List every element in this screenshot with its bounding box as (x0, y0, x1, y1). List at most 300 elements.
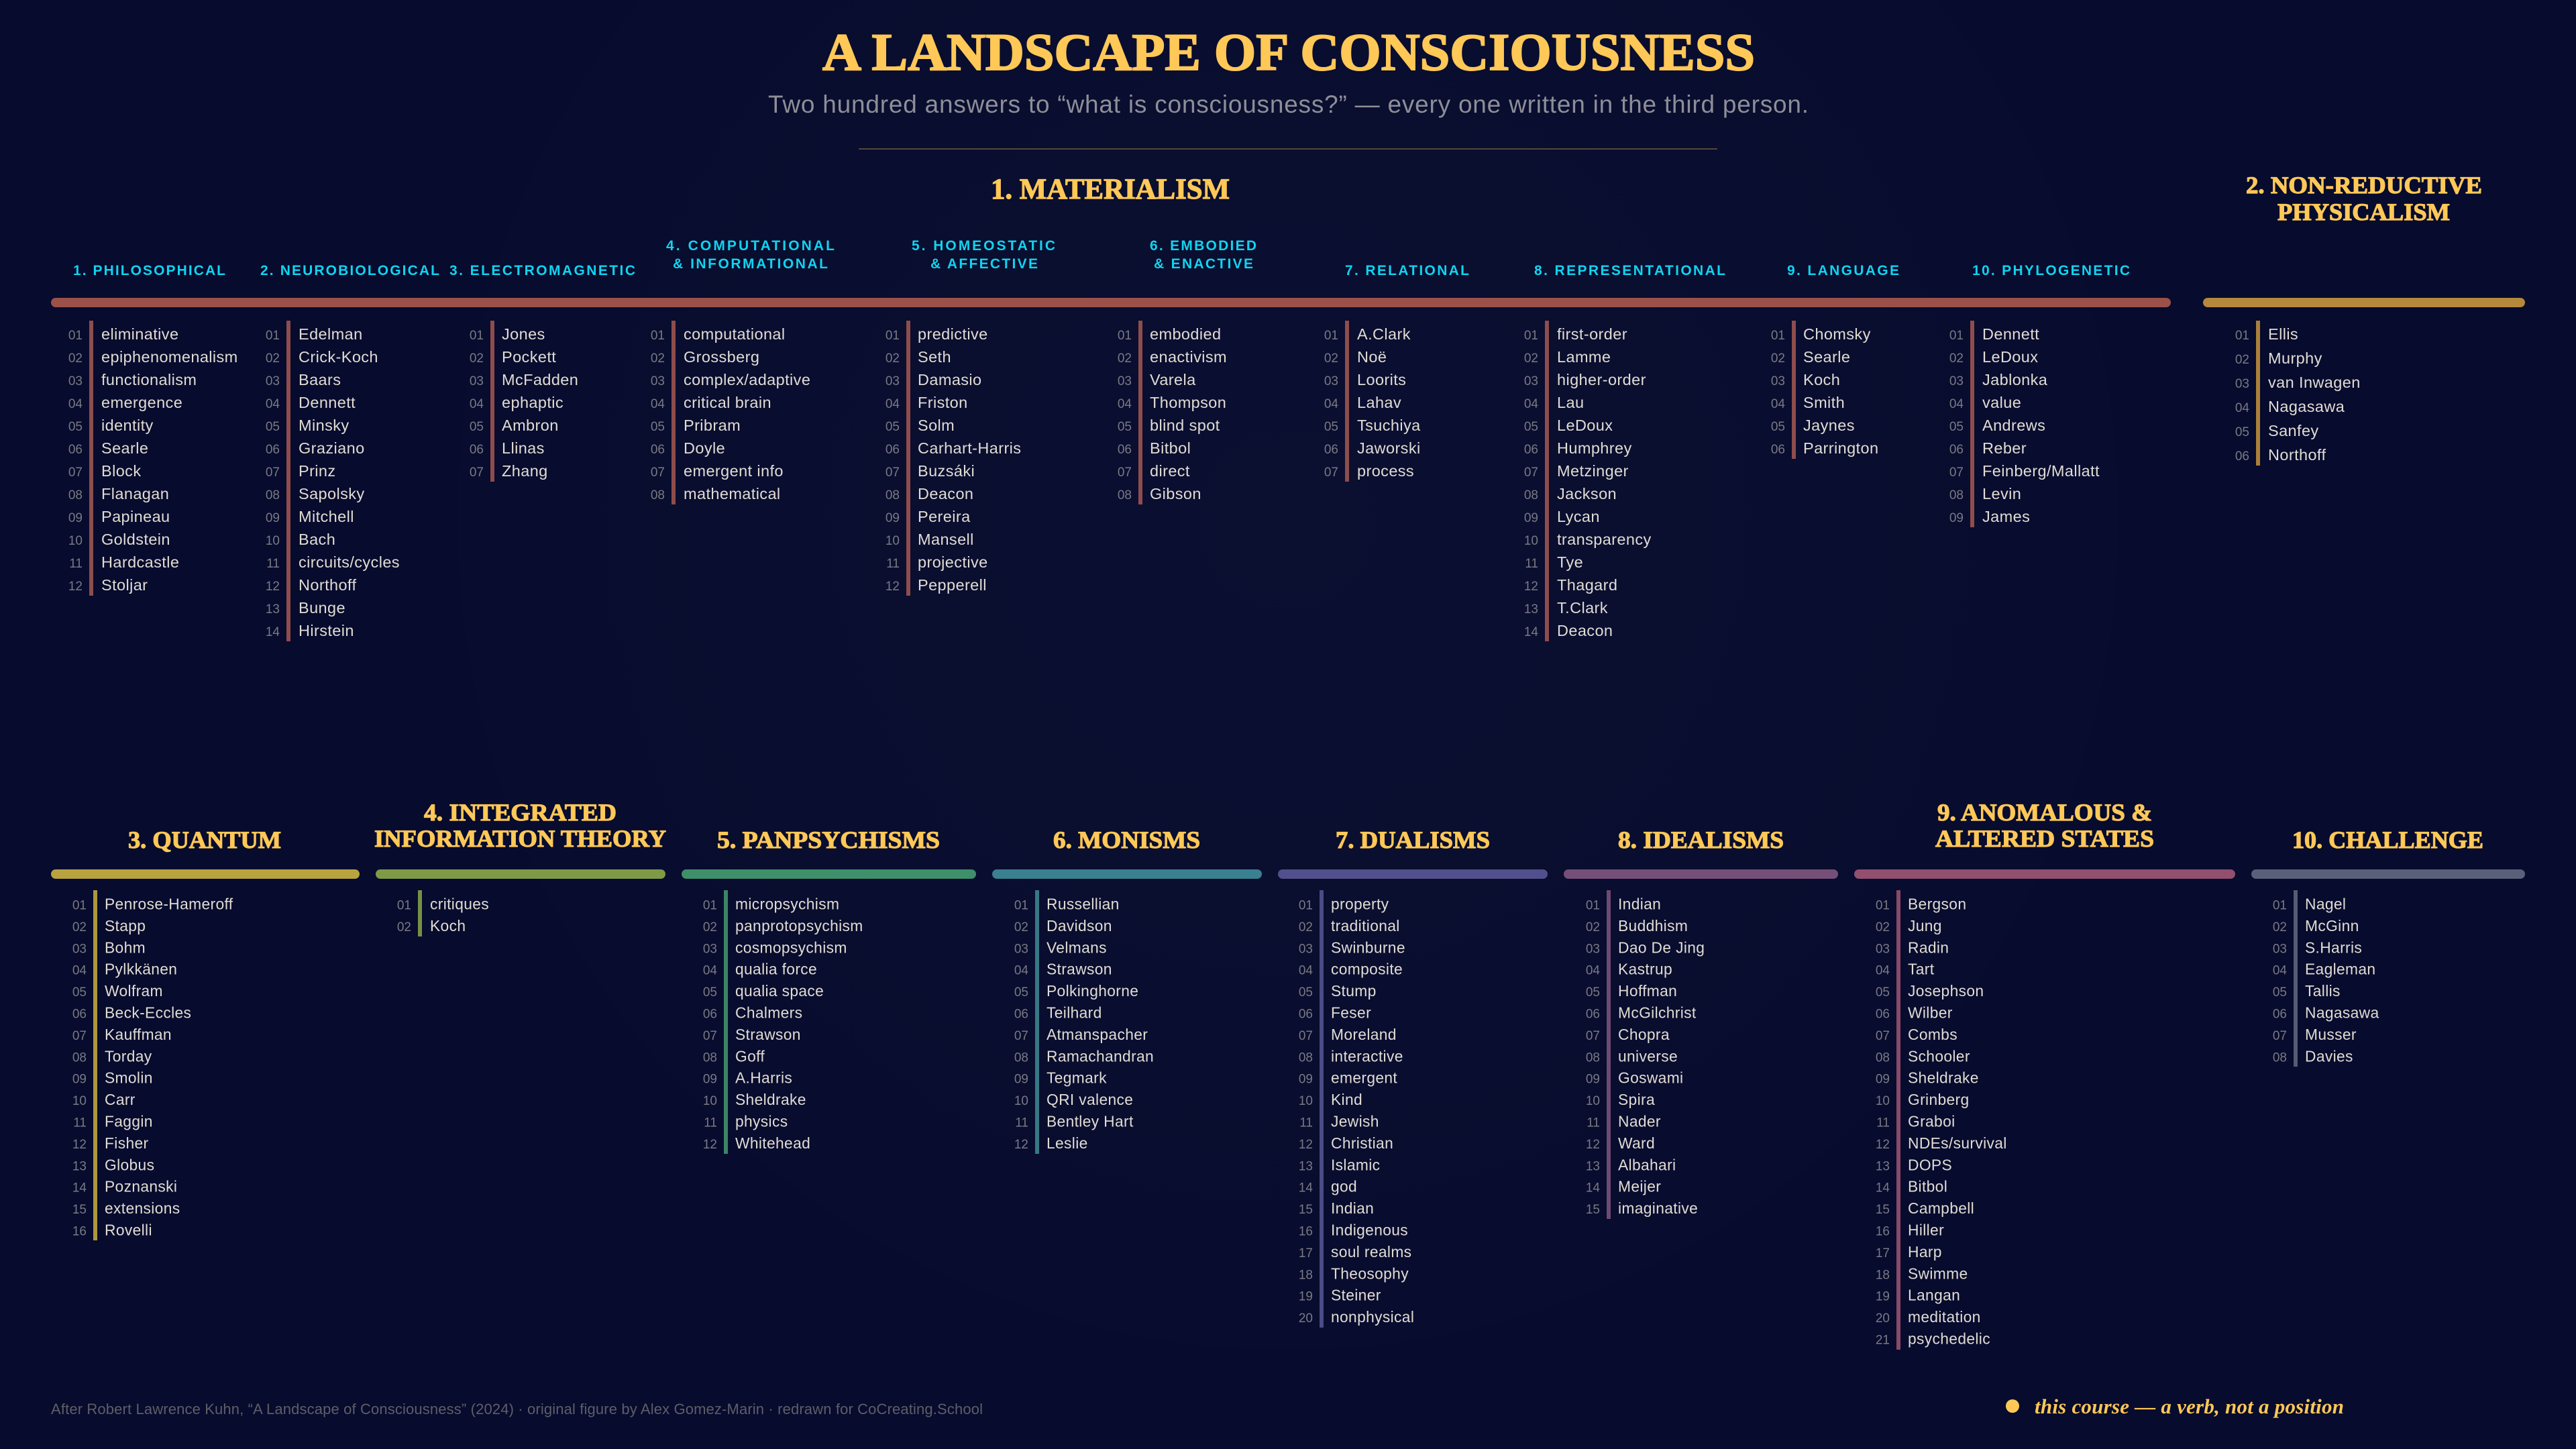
names: emergent (1331, 1069, 1397, 1087)
names: Northoff (2268, 446, 2326, 464)
names: qualia force (735, 961, 817, 978)
row numbers: 02 (2235, 353, 2249, 367)
row numbers: 02 (1118, 352, 1132, 366)
names: mathematical (684, 485, 781, 502)
names: Combs (1908, 1026, 1957, 1043)
names: Davidson (1046, 917, 1112, 934)
column: language (1771, 263, 1899, 459)
names: Teilhard (1046, 1004, 1102, 1021)
row numbers: 11 (704, 1116, 717, 1130)
names: Carr (105, 1091, 136, 1108)
names: Steiner (1331, 1287, 1381, 1304)
row numbers: 02 (266, 352, 280, 366)
title: A LANDSCAPE OF CONSCIOUSNESS (822, 23, 1755, 81)
names: Baars (299, 371, 341, 388)
row numbers: 08 (2273, 1051, 2287, 1065)
names: NDEs/survival (1908, 1134, 2007, 1152)
row numbers: 05 (703, 985, 717, 1000)
row numbers: 06 (2273, 1008, 2287, 1021)
row numbers: 02 (1299, 920, 1313, 934)
row numbers: 06 (1299, 1008, 1313, 1021)
names: emergent info (684, 462, 784, 480)
row numbers: 02 (885, 352, 900, 366)
colour band (1278, 869, 1548, 879)
names: Gibson (1150, 485, 1201, 502)
names: Nagasawa (2268, 398, 2345, 415)
row numbers: 01 (1014, 899, 1028, 912)
row numbers: 03 (651, 374, 665, 388)
column: electromagnetic (449, 263, 635, 482)
names: Bergson (1908, 895, 1966, 912)
row numbers: 07 (703, 1029, 717, 1043)
names: Strawson (1046, 961, 1112, 978)
names: Prinz (299, 462, 336, 480)
names: Murphy (2268, 350, 2322, 367)
names: Graboi (1908, 1112, 1955, 1130)
row numbers: 11 (266, 557, 280, 571)
row numbers: 11 (886, 557, 900, 571)
heading: PHYSICALISM (2277, 199, 2450, 225)
accent bar (1607, 890, 1611, 1219)
names: enactivism (1150, 348, 1227, 366)
names: traditional (1331, 917, 1400, 934)
heading: 4. INTEGRATED (424, 799, 616, 826)
accent bar (418, 890, 422, 936)
names: QRI valence (1046, 1091, 1133, 1108)
names: Nagasawa (2305, 1004, 2379, 1021)
names: Levin (1982, 485, 2021, 502)
row numbers: 19 (1876, 1290, 1890, 1304)
row numbers: 09 (1014, 1073, 1028, 1087)
colour band (992, 869, 1262, 879)
row numbers: 05 (1324, 420, 1338, 434)
subheading: 5. HOMEOSTATIC (912, 238, 1055, 254)
names: Tye (1557, 553, 1583, 571)
row numbers: 03 (2235, 377, 2249, 391)
subheading: 4. COMPUTATIONAL (666, 238, 835, 254)
row numbers: 07 (1586, 1029, 1600, 1043)
names: Buddhism (1618, 917, 1688, 934)
heading: 5. PANPSYCHISMS (717, 826, 940, 853)
row numbers: 11 (1015, 1116, 1028, 1130)
accent bar (1970, 321, 1974, 527)
names: Pylkkänen (105, 961, 177, 978)
row numbers: 12 (68, 580, 83, 594)
names: Jones (502, 325, 545, 343)
names: Bentley Hart (1046, 1112, 1134, 1130)
subheading: 8. REPRESENTATIONAL (1534, 263, 1725, 278)
row numbers: 03 (72, 942, 87, 956)
names: Musser (2305, 1026, 2357, 1043)
row numbers: 10 (72, 1094, 87, 1108)
row numbers: 07 (470, 466, 484, 480)
names: Goswami (1618, 1069, 1683, 1087)
names: Stapp (105, 917, 146, 934)
names: extensions (105, 1199, 180, 1217)
names: S.Harris (2305, 938, 2362, 956)
row numbers: 01 (397, 899, 411, 912)
row numbers: 08 (651, 488, 665, 502)
names: Bitbol (1908, 1178, 1947, 1195)
names: Doyle (684, 439, 725, 457)
row numbers: 14 (1524, 625, 1538, 639)
row numbers: 08 (703, 1051, 717, 1065)
row numbers: 16 (1876, 1225, 1890, 1238)
row numbers: 05 (72, 985, 87, 1000)
names: Chalmers (735, 1004, 802, 1021)
heading: INFORMATION THEORY (374, 825, 666, 852)
colour band (1854, 869, 2235, 879)
row numbers: 01 (1586, 899, 1600, 912)
row numbers: 15 (1586, 1203, 1600, 1217)
names: Parrington (1803, 439, 1878, 457)
row numbers: 06 (1949, 443, 1964, 457)
row numbers: 05 (1299, 985, 1313, 1000)
colour band (682, 869, 976, 879)
names: Stoljar (101, 576, 148, 594)
names: Koch (430, 917, 466, 934)
row numbers: 11 (1587, 1116, 1600, 1130)
row numbers: 05 (470, 420, 484, 434)
names: Andrews (1982, 417, 2045, 434)
row numbers: 07 (1118, 466, 1132, 480)
accent bar (1545, 321, 1549, 641)
row numbers: 06 (651, 443, 665, 457)
row numbers: 04 (1118, 397, 1132, 411)
names: embodied (1150, 325, 1221, 343)
row numbers: 04 (470, 397, 484, 411)
names: Tallis (2305, 982, 2341, 1000)
accent bar (1035, 890, 1039, 1154)
row numbers: 08 (885, 488, 900, 502)
row numbers: 04 (1586, 964, 1600, 978)
names: Faggin (105, 1112, 153, 1130)
column: computational and informational (651, 238, 835, 504)
names: Jackson (1557, 485, 1617, 502)
names: Buzsáki (918, 462, 975, 480)
names: Damasio (918, 371, 982, 388)
row numbers: 13 (266, 602, 280, 616)
row numbers: 02 (68, 352, 83, 366)
names: Bach (299, 531, 335, 548)
row numbers: 03 (2273, 942, 2287, 956)
row numbers: 01 (1524, 329, 1538, 343)
names: Kastrup (1618, 961, 1672, 978)
names: Bunge (299, 599, 345, 616)
names: Torday (105, 1047, 152, 1065)
row numbers: 18 (1299, 1268, 1313, 1282)
names: Pribram (684, 417, 741, 434)
row numbers: 07 (72, 1029, 87, 1043)
accent bar (286, 321, 290, 641)
names: Ward (1618, 1134, 1655, 1152)
row numbers: 10 (885, 534, 900, 548)
row numbers: 03 (266, 374, 280, 388)
names: Albahari (1618, 1156, 1676, 1173)
panel: 6. Monisms (992, 826, 1262, 1154)
column: embodied and enactive (1118, 238, 1256, 504)
colour band (376, 869, 665, 879)
names: Rovelli (105, 1221, 152, 1238)
row numbers: 10 (1524, 534, 1538, 548)
row numbers: 04 (1524, 397, 1538, 411)
names: Crick-Koch (299, 348, 378, 366)
names: direct (1150, 462, 1190, 480)
names: McGilchrist (1618, 1004, 1697, 1021)
names: Ramachandran (1046, 1047, 1154, 1065)
panel: 4. Integrated information theory (374, 799, 666, 936)
names: McFadden (502, 371, 578, 388)
names: Sapolsky (299, 485, 365, 502)
row numbers: 04 (885, 397, 900, 411)
row numbers: 14 (1586, 1181, 1600, 1195)
row numbers: 09 (1876, 1073, 1890, 1087)
row numbers: 04 (266, 397, 280, 411)
row numbers: 02 (703, 920, 717, 934)
names: Chomsky (1803, 325, 1871, 343)
row numbers: 07 (1014, 1029, 1028, 1043)
row numbers: 15 (72, 1203, 87, 1217)
accent bar (490, 321, 494, 482)
row numbers: 20 (1299, 1311, 1313, 1326)
row numbers: 16 (72, 1225, 87, 1238)
names: Kauffman (105, 1026, 172, 1043)
row numbers: 01 (1949, 329, 1964, 343)
names: Islamic (1331, 1156, 1380, 1173)
names: Christian (1331, 1134, 1393, 1152)
row numbers: 06 (703, 1008, 717, 1021)
names: Swimme (1908, 1265, 1968, 1282)
names: panprotopsychism (735, 917, 863, 934)
row numbers: 09 (72, 1073, 87, 1087)
heading: 8. IDEALISMS (1618, 826, 1784, 853)
names: McGinn (2305, 917, 2359, 934)
row numbers: 05 (651, 420, 665, 434)
row numbers: 07 (1524, 466, 1538, 480)
row numbers: 15 (1876, 1203, 1890, 1217)
row numbers: 07 (1324, 466, 1338, 480)
row numbers: 10 (1299, 1094, 1313, 1108)
names: T.Clark (1557, 599, 1608, 616)
names: Meijer (1618, 1178, 1661, 1195)
names: Jaworski (1357, 439, 1421, 457)
row numbers: 11 (1876, 1116, 1890, 1130)
row numbers: 02 (651, 352, 665, 366)
row numbers: 07 (1949, 466, 1964, 480)
names: Minsky (299, 417, 350, 434)
row numbers: 01 (703, 899, 717, 912)
row numbers: 06 (72, 1008, 87, 1021)
row numbers: 01 (266, 329, 280, 343)
column: relational (1324, 263, 1469, 482)
names: Hiller (1908, 1221, 1944, 1238)
row numbers: 01 (1876, 899, 1890, 912)
names: Penrose-Hameroff (105, 895, 233, 912)
row numbers: 01 (1324, 329, 1338, 343)
row numbers: 04 (703, 964, 717, 978)
subheading: 10. PHYLOGENETIC (1972, 263, 2130, 278)
names: Block (101, 462, 141, 480)
row numbers: 02 (470, 352, 484, 366)
subheading (1150, 238, 1256, 272)
subheading: 6. EMBODIED (1150, 238, 1256, 254)
names: Zhang (502, 462, 548, 480)
names: Carhart-Harris (918, 439, 1021, 457)
heading: ALTERED STATES (1935, 825, 2154, 852)
panel: 5. Panpsychisms (682, 826, 976, 1154)
names: Indian (1618, 895, 1661, 912)
row numbers: 03 (1324, 374, 1338, 388)
subheading: 1. PHILOSOPHICAL (73, 263, 225, 278)
heading: 6. MONISMS (1053, 826, 1200, 853)
names: Atmanspacher (1046, 1026, 1148, 1043)
accent bar (89, 321, 93, 596)
names: Eagleman (2305, 961, 2375, 978)
names: micropsychism (735, 895, 839, 912)
names: Lau (1557, 394, 1584, 411)
names: eliminative (101, 325, 178, 343)
names: higher-order (1557, 371, 1646, 388)
names: Pockett (502, 348, 556, 366)
accent bar (1896, 890, 1900, 1350)
names: Dao De Jing (1618, 938, 1705, 956)
panel: 2. Non-reductive physicalism (2203, 172, 2525, 466)
row numbers: 07 (651, 466, 665, 480)
row numbers: 06 (1014, 1008, 1028, 1021)
panel: 1. Materialism (51, 174, 2171, 641)
names: LeDoux (1557, 417, 1613, 434)
names: Moreland (1331, 1026, 1397, 1043)
row numbers: 17 (1299, 1246, 1313, 1260)
names: Feinberg/Mallatt (1982, 462, 2100, 480)
accent bar (1320, 890, 1324, 1328)
names: predictive (918, 325, 988, 343)
heading: 1. Materialism: 1. MATERIALISM (991, 174, 1230, 205)
names: universe (1618, 1047, 1678, 1065)
names: Sheldrake (735, 1091, 806, 1108)
row numbers: 07 (1876, 1029, 1890, 1043)
row numbers: 10 (266, 534, 280, 548)
names: James (1982, 508, 2030, 525)
accent bar (93, 890, 97, 1240)
names: Tsuchiya (1357, 417, 1421, 434)
names: Varela (1150, 371, 1196, 388)
row numbers: 02 (1524, 352, 1538, 366)
row numbers: 10 (1014, 1094, 1028, 1108)
names: critiques (430, 895, 489, 912)
names: Smith (1803, 394, 1845, 411)
colour band (1564, 869, 1838, 879)
names: identity (101, 417, 154, 434)
row numbers: 14 (1299, 1181, 1313, 1195)
row numbers: 06 (1876, 1008, 1890, 1021)
names: A.Clark (1357, 325, 1411, 343)
row numbers: 07 (885, 466, 900, 480)
row numbers: 01 (651, 329, 665, 343)
row numbers: 04 (2273, 964, 2287, 978)
row numbers: 06 (1324, 443, 1338, 457)
names: Grinberg (1908, 1091, 1970, 1108)
row numbers: 10 (1586, 1094, 1600, 1108)
row numbers: 03 (1771, 374, 1785, 388)
names: Mitchell (299, 508, 354, 525)
row numbers: 08 (1014, 1051, 1028, 1065)
row numbers: 12 (1876, 1138, 1890, 1152)
names: Davies (2305, 1047, 2353, 1065)
names: Schooler (1908, 1047, 1970, 1065)
row numbers: 01 (72, 899, 87, 912)
names: qualia space (735, 982, 824, 1000)
names: Tegmark (1046, 1069, 1107, 1087)
row numbers: 12 (703, 1138, 717, 1152)
row numbers: 01 (885, 329, 900, 343)
names: Fisher (105, 1134, 148, 1152)
names: Wilber (1908, 1004, 1953, 1021)
row numbers: 10 (68, 534, 83, 548)
names: projective (918, 553, 988, 571)
panel: 10. Challenge (2251, 826, 2525, 1067)
names: Pereira (918, 508, 971, 525)
names: transparency (1557, 531, 1652, 548)
names: Langan (1908, 1287, 1960, 1304)
names: Noë (1357, 348, 1387, 366)
names: Whitehead (735, 1134, 810, 1152)
accent bar (2256, 321, 2260, 466)
row numbers: 04 (72, 964, 87, 978)
names: Swinburne (1331, 938, 1405, 956)
row numbers: 20 (1876, 1311, 1890, 1326)
names: complex/adaptive (684, 371, 810, 388)
subheading: 7. RELATIONAL (1345, 263, 1469, 278)
names: Llinas (502, 439, 545, 457)
row numbers: 01 (2235, 329, 2249, 343)
column: representational (1524, 263, 1725, 641)
names: meditation (1908, 1308, 1981, 1326)
names: Globus (105, 1156, 154, 1173)
row numbers: 02 (2273, 920, 2287, 934)
row numbers: 14 (266, 625, 280, 639)
accent bar (906, 321, 910, 596)
column: neurobiological (260, 263, 439, 641)
names: Goldstein (101, 531, 170, 548)
row numbers: 16 (1299, 1225, 1313, 1238)
names: Indigenous (1331, 1221, 1408, 1238)
row numbers: 09 (885, 511, 900, 525)
row numbers: 08 (1524, 488, 1538, 502)
names: Reber (1982, 439, 2027, 457)
names: Metzinger (1557, 462, 1629, 480)
heading: 3. QUANTUM (128, 826, 281, 853)
names: circuits/cycles (299, 553, 400, 571)
row numbers: 06 (266, 443, 280, 457)
subheading (912, 238, 1055, 272)
row numbers: 02 (1586, 920, 1600, 934)
row numbers: 05 (1771, 420, 1785, 434)
names: Tart (1908, 961, 1935, 978)
names: blind spot (1150, 417, 1220, 434)
row numbers: 01 (2273, 899, 2287, 912)
row numbers: 05 (1586, 985, 1600, 1000)
row numbers: 08 (1118, 488, 1132, 502)
row numbers: 01 (68, 329, 83, 343)
row numbers: 04 (1324, 397, 1338, 411)
row numbers: 05 (2235, 425, 2249, 439)
row numbers: 10 (703, 1094, 717, 1108)
row numbers: 08 (1299, 1051, 1313, 1065)
row numbers: 05 (2273, 985, 2287, 1000)
subheading: & INFORMATIONAL (673, 256, 828, 272)
row numbers: 09 (266, 511, 280, 525)
